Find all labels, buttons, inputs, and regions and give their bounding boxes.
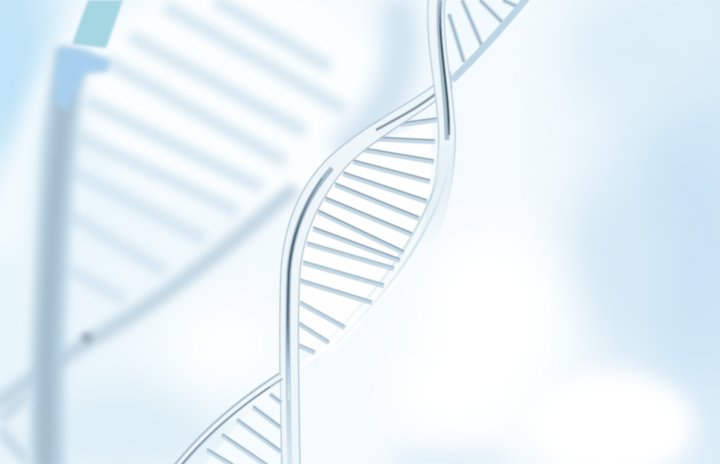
bottom rungs backing [205,382,280,464]
bottom rungs [207,394,281,464]
bottom-left strand [176,376,281,464]
rungs [299,118,437,353]
near strand with crossover [280,72,452,464]
top vertical strand [425,0,449,245]
dark crossover shading [376,92,438,130]
far strand of sharp helix [298,118,445,368]
light body [425,0,447,245]
grey centre of vertical strand [46,90,66,464]
blurred node [81,332,93,344]
top-right rungs and strand [446,0,530,80]
blurred vertical strand [47,50,72,464]
mid tone [439,0,447,140]
outer body [425,0,447,245]
blurred lower strand [0,188,295,405]
blurred white backing of helix [85,0,385,210]
blurred background helix [0,0,401,464]
dark core [440,0,449,135]
inner highlight of fading strand [298,165,445,368]
tube shading [288,168,332,464]
core line of vertical strand [288,178,322,400]
blue band on vertical strand [54,47,110,112]
pale outer arc [5,0,105,250]
white rung panels [298,122,432,352]
top-right strand [452,0,530,80]
blurred curved ridge [340,0,401,155]
fading strand [298,165,445,368]
bottom-left helix section [176,376,281,464]
teal tip of vertical strand [72,0,123,48]
blurred rungs [66,0,345,300]
lower-left fragment [0,395,28,462]
tapered tube body [280,72,452,464]
